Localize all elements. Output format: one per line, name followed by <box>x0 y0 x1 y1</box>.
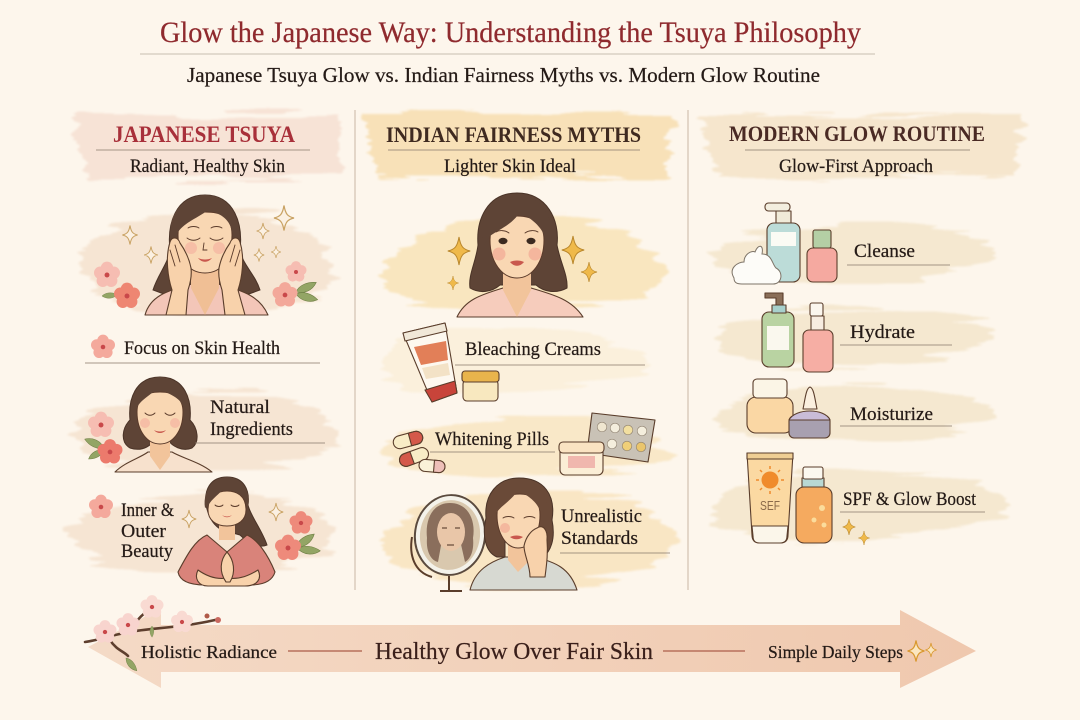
item: Focus on Skin Health: Focus on Skin Health <box>124 338 280 359</box>
item: Moisturize <box>712 379 994 442</box>
item: Hydrate <box>714 293 994 372</box>
item: Unrealistic Standards: Standards <box>561 528 638 549</box>
item: Natural Ingredients: Ingredients <box>210 419 293 440</box>
column header: Indian Fairness Myths <box>362 114 677 178</box>
item: Whitening Pills <box>382 413 671 476</box>
panel: Indian Fairness Myths <box>362 114 679 591</box>
column header: Japanese Tsuya: JAPANESE TSUYA <box>113 122 295 147</box>
label: Holistic Radiance: Holistic Radiance <box>141 642 277 662</box>
item: Inner and Outer Beauty: Outer <box>121 521 167 542</box>
column header: Japanese Tsuya <box>74 114 338 178</box>
icon: cherry blossom branch <box>85 595 221 673</box>
item: Inner and Outer Beauty: Inner & <box>121 500 174 521</box>
icon: sparkles <box>908 640 937 662</box>
item: Bleaching Creams <box>384 323 648 402</box>
illustration: woman with lighter skin ideal <box>382 193 667 317</box>
label: Healthy Glow Over Fair Skin: Healthy Glow Over Fair Skin <box>375 639 653 665</box>
item: Natural Ingredients <box>74 377 337 472</box>
item: Unrealistic Standards: Unrealistic <box>561 506 642 527</box>
item: Hydrate: Hydrate <box>850 322 915 343</box>
item: Moisturize: Moisturize <box>850 404 933 425</box>
item: Focus on Skin Health <box>85 335 320 363</box>
column header: Indian Fairness Myths: INDIAN FAIRNESS MYTHS <box>386 122 641 147</box>
item: SPF and Glow Boost: SEF <box>760 498 780 513</box>
bottom double arrow banner <box>85 595 976 688</box>
item: Inner and Outer Beauty <box>68 477 336 586</box>
title: Glow the Japanese Way: Understanding the Tsuya Philosophy <box>160 16 861 49</box>
item: Whitening Pills: Whitening Pills <box>435 429 549 450</box>
subtitle: Japanese Tsuya Glow vs. Indian Fairness Myths vs. Modern Glow Routine <box>187 63 820 87</box>
column header: Japanese Tsuya: Radiant, Healthy Skin <box>130 156 285 177</box>
label: Simple Daily Steps: Simple Daily Steps <box>768 642 903 662</box>
item: Unrealistic Standards <box>382 478 679 591</box>
item: Inner and Outer Beauty: Beauty <box>121 541 173 562</box>
panel: Modern Glow Routine <box>702 114 1024 545</box>
item: SPF and Glow Boost: SPF & Glow Boost <box>843 489 977 510</box>
item: Natural Ingredients: Natural <box>210 397 270 418</box>
panel: Japanese Tsuya <box>68 114 338 586</box>
illustration: woman touching glowing face <box>80 195 334 315</box>
column header: Modern Glow Routine <box>702 114 1024 178</box>
column header: Indian Fairness Myths: Lighter Skin Ideal <box>444 156 576 177</box>
item: Cleanse: Cleanse <box>854 241 915 262</box>
item: Cleanse <box>712 203 996 284</box>
column header: Modern Glow Routine: Glow-First Approach <box>779 156 933 177</box>
item: SPF and Glow Boost <box>710 453 1008 545</box>
item: Bleaching Creams: Bleaching Creams <box>465 339 601 360</box>
column header: Modern Glow Routine: MODERN GLOW ROUTINE <box>729 121 985 146</box>
